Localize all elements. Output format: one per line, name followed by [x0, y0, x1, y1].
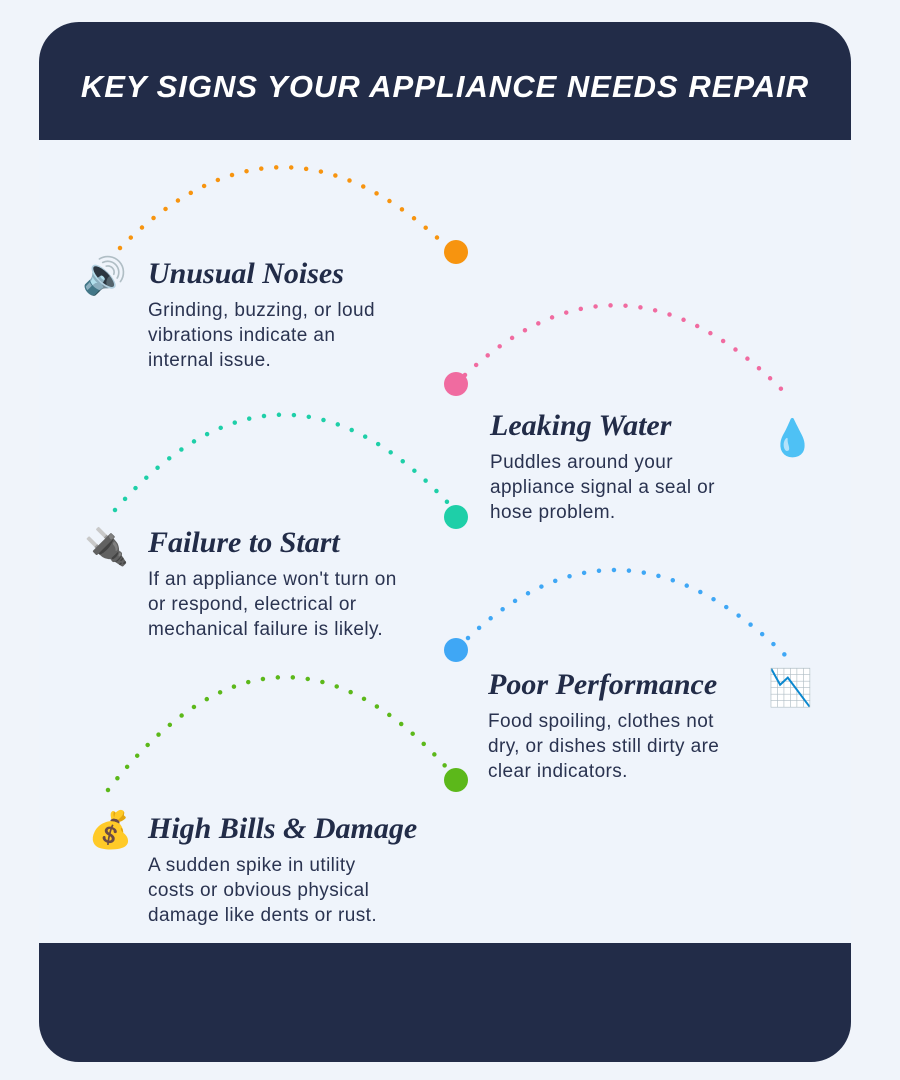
- item: unusual noises: Unusual Noises: [148, 257, 344, 290]
- item: high bills: High Bills & Damage: [148, 812, 417, 845]
- item: high bills: damage like dents or rust.: [148, 905, 377, 926]
- item: leaking water: appliance signal a seal or: [490, 477, 715, 498]
- item: unusual noises: Grinding, buzzing, or loud: [148, 300, 375, 321]
- item: high bills: A sudden spike in utility: [148, 855, 356, 876]
- item: poor performance: Poor Performance: [488, 668, 717, 701]
- footer band: [39, 943, 851, 1062]
- icon: speaker: 🔊: [82, 255, 127, 297]
- item: leaking water: hose problem.: [490, 502, 616, 523]
- icon: water drop: 💧: [770, 417, 815, 459]
- item: unusual noises: internal issue.: [148, 350, 271, 371]
- item: failure to start: If an appliance won't turn on: [148, 569, 397, 590]
- item: poor performance: Food spoiling, clothes not: [488, 711, 714, 732]
- icon: money bag: 💰: [88, 809, 133, 851]
- item: failure to start: Failure to Start: [148, 526, 340, 559]
- item: leaking water: [490, 409, 715, 523]
- title: KEY SIGNS YOUR APPLIANCE NEEDS REPAIR: [81, 69, 809, 104]
- item: poor performance: dry, or dishes still dirty are: [488, 736, 719, 757]
- item: poor performance: clear indicators.: [488, 761, 628, 782]
- item: failure to start: mechanical failure is likely.: [148, 619, 383, 640]
- item: unusual noises: [148, 257, 375, 371]
- item: unusual noises: vibrations indicate an: [148, 325, 335, 346]
- header band: [39, 22, 851, 140]
- item: failure to start: or respond, electrical or: [148, 594, 357, 615]
- item: leaking water: Puddles around your: [490, 452, 673, 473]
- icon: plug: 🔌: [84, 526, 129, 568]
- icon: chart down: 📉: [768, 667, 813, 709]
- item: high bills: costs or obvious physical: [148, 880, 369, 901]
- item: leaking water: Leaking Water: [490, 409, 671, 442]
- item: poor performance: [488, 668, 719, 782]
- item: failure to start: [148, 526, 397, 640]
- item: high bills: [148, 812, 417, 926]
